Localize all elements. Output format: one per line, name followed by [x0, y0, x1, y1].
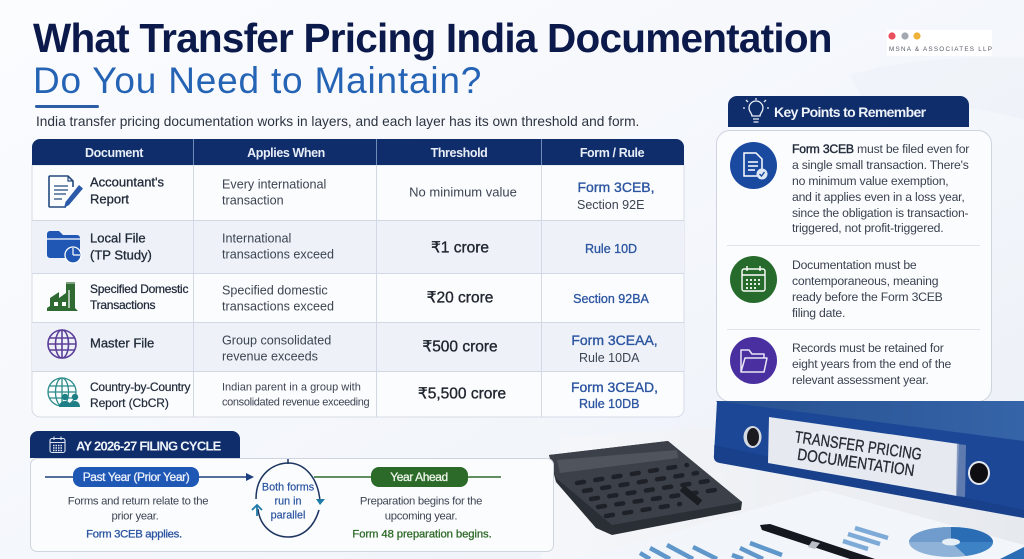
line: Specified Domestic: [90, 282, 188, 296]
pill label: Past Year (Prior Year): [83, 470, 189, 484]
icon: globe: [47, 329, 77, 359]
key points card: [716, 130, 992, 402]
applies: group consolidated revenue exceeds: [222, 333, 331, 364]
subtitle: Do You Need to Maintain?: [33, 60, 482, 101]
icon: folder circle: [730, 337, 777, 384]
form: Form 3CEAD: Form 3CEAD,: [571, 378, 658, 394]
filing cycle heading: AY 2026-27 FILING CYCLE: [76, 438, 221, 453]
key points heading: Key Points to Remember: [774, 104, 925, 120]
pill: year ahead: [371, 467, 468, 487]
line: (TP Study): [90, 248, 152, 262]
line: Specified domestic: [222, 283, 328, 297]
text: Master File: Master File: [90, 336, 154, 350]
line: Records must be retained for: [792, 341, 944, 355]
text: Local File (TP Study): [90, 230, 152, 262]
line: no minimum value exemption,: [792, 174, 948, 188]
rule: Rule 10D: Rule 10D: [585, 242, 637, 256]
line: Group consolidated: [222, 333, 331, 347]
line: relevant assessment year.: [792, 373, 929, 387]
icon: globe with people: [47, 377, 80, 407]
icon: factory: [47, 282, 78, 311]
line: Report (CbCR): [90, 396, 169, 410]
header: Applies When: Applies When: [247, 145, 325, 159]
header: Document: Document: [85, 145, 143, 159]
year ahead description: [352, 495, 492, 540]
icon: document check circle: [730, 142, 777, 189]
line: Forms and return relate to the: [68, 495, 208, 507]
title: What Transfer Pricing India Documentation: [33, 15, 832, 61]
line: Transactions: [90, 298, 155, 312]
threshold: 1 crore: ₹1 crore: [431, 239, 489, 256]
intro sentence: India transfer pricing documentation works in layers, and each layer has its own threshold and form.: [36, 114, 639, 129]
line: Local File: [90, 230, 146, 246]
line: since the obligation is transaction-: [792, 205, 968, 219]
text: Country-by-Country Report (CbCR): [90, 380, 191, 410]
table body: [32, 139, 684, 418]
line: Report: [90, 192, 129, 206]
header: Form / Rule: Form / Rule: [580, 145, 644, 159]
binder label text: [791, 428, 923, 481]
rule: Rule 10DB: Rule 10DB: [579, 397, 639, 411]
divider: [727, 245, 980, 246]
form note: Form 3CEB applies.: [86, 528, 182, 540]
applies: Indian parent group: [222, 382, 369, 408]
header: Threshold: Threshold: [431, 145, 487, 159]
cycle text: [262, 482, 314, 522]
line: Documentation must be: [792, 258, 917, 272]
line: parallel: [271, 510, 305, 522]
rule: Section 92E: Section 92E: [577, 197, 644, 211]
line: Preparation begins for the: [360, 495, 482, 507]
rule: Section 92BA: Section 92BA: [573, 291, 649, 305]
filing cycle card: [30, 458, 554, 552]
past year description: [68, 495, 208, 540]
panel: AY 2026-27 filing cycle: [30, 431, 554, 552]
line: revenue exceeds: [222, 350, 318, 364]
logo text: MSNA & ASSOCIATES LLP: [889, 46, 993, 53]
divider: [727, 329, 980, 330]
threshold: 500 crore: ₹500 crore: [422, 338, 498, 355]
applies: every international transaction: [222, 177, 326, 208]
text: Specified Domestic Transactions: [90, 282, 188, 312]
pill: past year: [73, 467, 199, 487]
line: Country-by-Country: [90, 380, 190, 394]
line: upcoming year.: [385, 510, 457, 522]
panel: documentation table: [32, 139, 684, 418]
binder label text: TRANSFER PRICING: [794, 428, 923, 464]
line: prior year.: [112, 510, 158, 522]
point 3 text: [792, 341, 951, 387]
text: Accountant's Report: [90, 174, 164, 206]
line: ready before the Form 3CEB: [792, 290, 943, 304]
line: transaction: [222, 194, 284, 208]
pill label: Year Ahead: [390, 470, 448, 484]
line: Form 3CEB must be filed even for: [792, 142, 969, 156]
logo: MSNA & Associates: [887, 30, 992, 56]
line: International: [222, 231, 291, 245]
logo dots: [888, 32, 921, 40]
line: and it applies even in a loss year,: [792, 190, 965, 204]
line: transactions exceed: [222, 300, 334, 314]
icon: accountant's report: [48, 175, 83, 208]
form note: Form 48 preparation begins.: [352, 528, 492, 540]
threshold: 20 crore: ₹20 crore: [427, 289, 493, 306]
binder label text: DOCUMENTATION: [796, 446, 916, 480]
line: eight years from the end of the: [792, 357, 951, 371]
title underline: [35, 105, 99, 108]
rule: Rule 10DA: Rule 10DA: [579, 350, 639, 364]
threshold: no minimum value: No minimum value: [409, 184, 517, 200]
icon: calendar: [49, 436, 66, 453]
line: Indian parent in a group with: [222, 382, 361, 394]
line: run in: [274, 496, 302, 508]
key points header: [728, 96, 969, 127]
line: contemporaneous, meaning: [792, 274, 938, 288]
icon: calendar circle: [730, 256, 777, 303]
line: Both forms: [262, 482, 314, 494]
threshold: 5,500 crore: ₹5,500 crore: [418, 385, 506, 402]
line: filing date.: [792, 306, 845, 320]
line: triggered, not profit-triggered.: [792, 221, 943, 235]
line: a single small transaction. There's: [792, 158, 969, 172]
panel: key points to remember: [716, 96, 992, 401]
icon: local file folder: [47, 231, 82, 264]
form: Form 3CEAA: Form 3CEAA,: [571, 332, 658, 348]
form: Form 3CEB: Form 3CEB,: [577, 179, 655, 195]
point 1 text: [792, 142, 970, 235]
applies: specified domestic transactions exceed: [222, 283, 334, 314]
icon: light bulb: [743, 98, 769, 123]
line: consolidated revenue exceeding: [222, 396, 369, 408]
line: transactions exceed: [222, 248, 334, 262]
filing cycle header: [30, 431, 240, 458]
point 2 text: [792, 258, 943, 320]
line: Every international: [222, 177, 326, 191]
applies: international transactions exceed: [222, 231, 334, 262]
line: Accountant's: [90, 174, 164, 190]
